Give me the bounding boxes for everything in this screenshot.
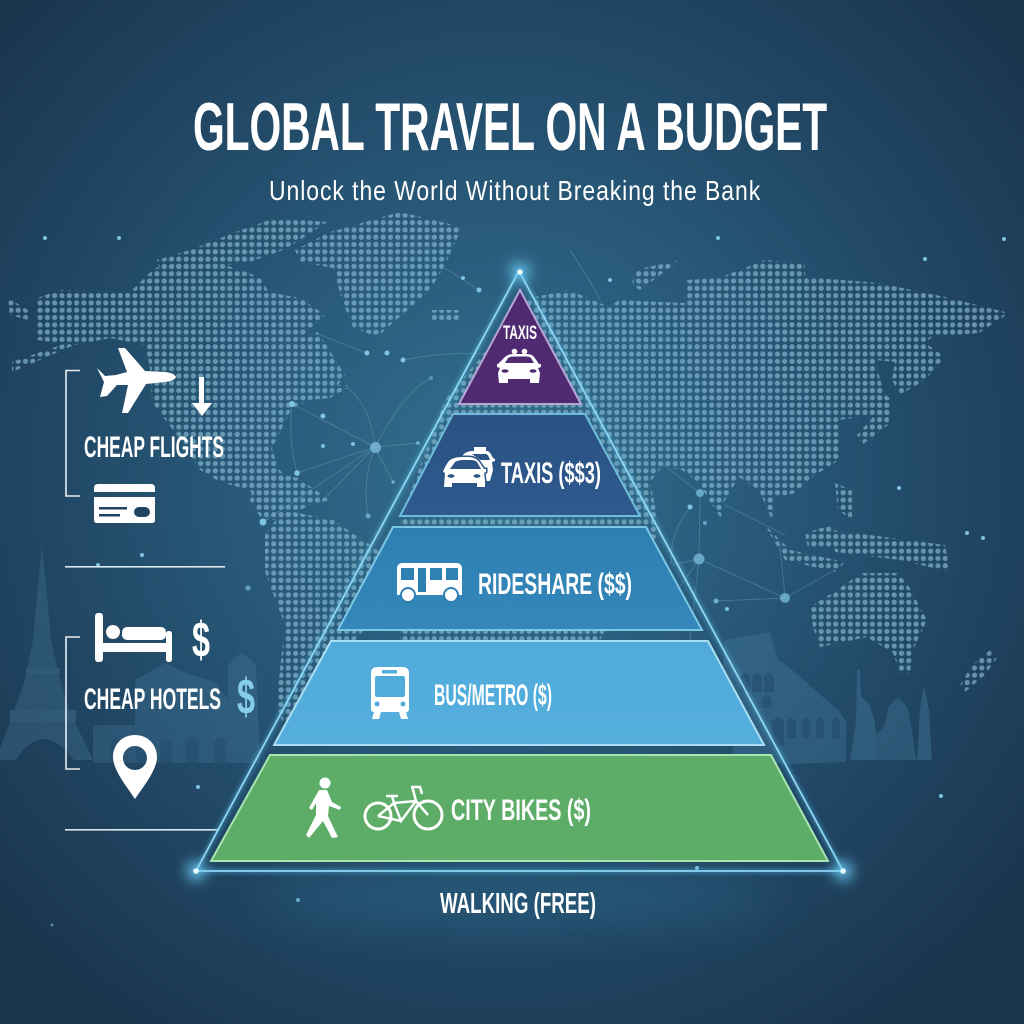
map: south america	[265, 510, 392, 735]
divider: lower	[65, 829, 218, 831]
map: japan	[857, 390, 892, 445]
map: greenland	[295, 212, 462, 337]
bracket: flights	[66, 370, 80, 496]
icon: bicycle	[365, 786, 442, 829]
map: australia	[810, 573, 927, 673]
network lines	[263, 250, 835, 640]
map: alaska islands	[8, 298, 75, 372]
icon: dollar sign white: $	[192, 612, 210, 668]
divider: upper	[65, 566, 225, 568]
tier 4: bus and metro	[274, 641, 764, 745]
label: walking (free): WALKING (FREE)	[440, 888, 596, 920]
pyramid	[187, 263, 852, 880]
icon: taxi	[497, 349, 541, 383]
icon: metro train	[371, 667, 409, 719]
label: city bikes: CITY BIKES ($)	[451, 794, 591, 827]
title: GLOBAL TRAVEL ON A BUDGET	[193, 88, 827, 165]
landmark: capitol building	[876, 697, 916, 760]
tier 1: premium taxis	[459, 290, 581, 404]
label: rideshare: RIDESHARE ($$)	[478, 568, 632, 601]
label: taxis ($$3): TAXIS ($$3)	[501, 457, 601, 490]
dotted world map	[8, 212, 1009, 735]
pyramid outer frame	[196, 271, 843, 871]
tier 3: rideshare	[338, 527, 702, 630]
map: eurasia and africa	[400, 260, 1009, 640]
label: taxis: TAXIS	[503, 323, 537, 344]
glow points	[187, 263, 852, 880]
tier 2: taxis	[400, 414, 640, 516]
landmark: eiffel tower	[0, 545, 93, 760]
landmark: statue of liberty	[850, 670, 878, 760]
icon: credit card	[94, 484, 155, 523]
landmark: colosseum	[722, 632, 846, 764]
icon: walker	[306, 778, 341, 838]
subtitle: Unlock the World Without Breaking the Bank	[269, 176, 760, 207]
icon: taxis	[443, 447, 495, 487]
icon: bus	[397, 563, 462, 602]
bracket: hotels	[66, 637, 80, 769]
label: cheap flights: CHEAP FLIGHTS	[84, 431, 224, 464]
icon: down arrow	[192, 377, 212, 416]
icon: dollar sign blue: $	[237, 669, 255, 725]
tier 5: city bikes	[211, 755, 828, 861]
landmark: domed building and clock tower	[93, 652, 260, 763]
icon: map pin	[113, 735, 157, 799]
landmark: tall tower	[917, 685, 932, 760]
map: new zealand	[960, 650, 997, 692]
network nodes	[43, 236, 1006, 926]
label: cheap hotels: CHEAP HOTELS	[84, 683, 221, 716]
map: scandinavia	[632, 260, 680, 290]
map: arctic islands	[157, 218, 327, 272]
map: north america	[37, 258, 352, 508]
map: central america and caribbean	[250, 470, 330, 520]
map: southeast asia islands	[765, 483, 950, 572]
icon: airplane	[97, 348, 176, 413]
left panel: cheap flights	[66, 348, 224, 523]
label: bus/metro: BUS/METRO ($)	[434, 679, 552, 712]
map: iceland	[430, 310, 460, 322]
icon: bed	[95, 613, 172, 662]
left panel: cheap hotels	[66, 612, 255, 799]
